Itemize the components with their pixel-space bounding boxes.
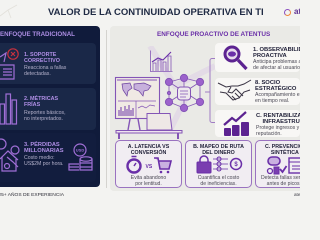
card: perdidas millonarias	[0, 133, 96, 182]
description: no interpretados.	[24, 116, 63, 122]
description: por lentitud.	[135, 181, 162, 187]
illustration: dashboard network	[114, 46, 215, 139]
description: Evita abandono	[131, 175, 166, 181]
icon: bars	[0, 93, 18, 125]
text: observabilidad proactiva: PROACTIVA	[253, 53, 287, 59]
icon: stopwatch and cart: VS	[146, 164, 153, 170]
icon: rising coins	[223, 111, 249, 136]
text: prevencion: SINTÉTICA	[271, 150, 299, 156]
text: soporte correctivo: 1. SOPORTE	[24, 52, 56, 58]
text: perdidas millonarias: MILLONARIAS	[24, 148, 64, 154]
description	[24, 64, 66, 77]
laptop	[147, 114, 172, 130]
description: US$2M por hora.	[24, 161, 64, 167]
text: perdidas millonarias	[24, 141, 64, 154]
text: latencia	[128, 144, 170, 156]
text: observabilidad proactiva	[253, 47, 300, 59]
text: soporte correctivo	[24, 52, 60, 64]
description: Reacciona a fallas	[24, 64, 66, 70]
description: Costo medio:	[24, 154, 55, 160]
text: rentabilizar	[256, 113, 300, 125]
card: mapeo de ruta	[185, 140, 252, 188]
text: metricas frias: 2. MÉTRICAS	[24, 96, 58, 102]
network	[169, 78, 200, 108]
card: prevencion sintetica	[255, 140, 315, 188]
text: latencia: A. LATENCIA VS	[128, 144, 169, 150]
text: socio estrategico: ESTRATÉGICO	[255, 86, 296, 92]
icon: magnifier eye	[224, 46, 248, 70]
icon: usd coins	[68, 143, 93, 171]
text: prevencion	[265, 144, 300, 156]
description: en tiempo real.	[255, 98, 289, 104]
description: antes de picos.	[267, 181, 300, 187]
description	[255, 92, 300, 104]
description: de afectar al usuario.	[253, 65, 300, 71]
icon: lock and money route	[196, 155, 242, 174]
heading: enfoque proactivo: ENFOQUE PROACTIVO DE ATENTUS	[157, 31, 270, 38]
description	[131, 175, 166, 187]
card: soporte correctivo	[0, 43, 96, 84]
description: de ineficiencias.	[200, 181, 237, 187]
card: latencia vs conversion	[115, 140, 182, 188]
description: detectadas.	[24, 71, 51, 77]
description	[256, 125, 300, 137]
text: mapeo: DEL DINERO	[202, 150, 235, 156]
title: VALOR DE LA CONTINUIDAD OPERATIVA EN TI	[48, 6, 264, 18]
icon: falling house	[0, 138, 20, 172]
icon: stopwatch and cart	[126, 156, 172, 174]
panel: enfoque tradicional	[0, 26, 100, 187]
description	[253, 59, 300, 71]
card: socio estrategico	[215, 78, 300, 105]
description	[24, 154, 64, 167]
divider line	[106, 30, 107, 188]
text: socio estrategico	[255, 80, 296, 92]
description: reputación.	[256, 131, 282, 137]
monitor	[116, 78, 160, 118]
text: socio estrategico: 8. SOCIO	[255, 80, 280, 86]
description: Reportes básicos,	[24, 110, 66, 116]
description	[24, 110, 66, 122]
card: metricas frias	[0, 88, 96, 130]
desk	[116, 130, 182, 133]
description	[261, 175, 300, 187]
text: metricas frias	[24, 95, 58, 108]
text: soporte correctivo: CORRECTIVO	[24, 58, 60, 64]
icon: robot and checklist	[266, 156, 300, 174]
bracket	[205, 58, 215, 122]
icon: handshake	[218, 80, 252, 101]
card: observabilidad proactiva	[215, 43, 300, 72]
panel: enfoque proactivo	[110, 26, 300, 191]
heading: enfoque tradicional: ENFOQUE TRADICIONAL	[0, 31, 75, 38]
logo	[284, 7, 300, 16]
card: rentabilizar infraestructura	[215, 110, 300, 137]
description	[198, 175, 240, 187]
text: perdidas millonarias: 3. PÉRDIDAS	[24, 142, 60, 148]
description: Protege ingresos y	[256, 125, 299, 131]
text: mapeo	[193, 144, 244, 156]
chart	[150, 50, 172, 72]
description: Cuantifica el costo	[198, 175, 239, 181]
icon: lock and money route: $	[234, 162, 238, 168]
text: latencia: CONVERSIÓN	[131, 150, 166, 156]
icon: usd coins: USD	[76, 148, 84, 153]
text: mapeo: B. MAPEO DE RUTA	[193, 144, 244, 150]
text: metricas frias: FRÍAS	[24, 102, 40, 108]
icon: failed document	[0, 48, 19, 80]
